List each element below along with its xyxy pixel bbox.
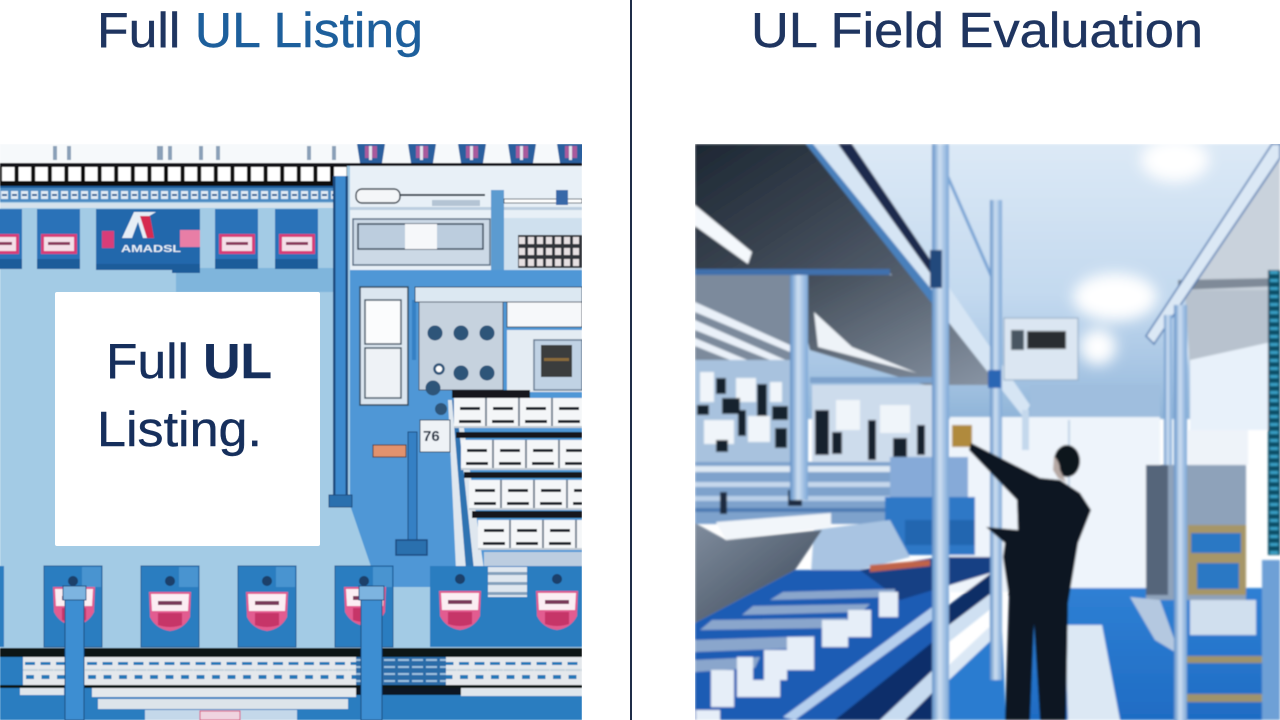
center divider line: [630, 0, 632, 720]
blue machine: [885, 457, 975, 555]
illustration wall background: [0, 165, 582, 649]
right gantry: [1190, 145, 1280, 300]
step bars: [1186, 656, 1262, 702]
lower conveyor: [0, 648, 582, 720]
rails below machinery: [695, 460, 892, 526]
small pipe, tag and label: [373, 420, 450, 555]
button control panel: [415, 287, 582, 415]
card text: Listing.: Listing.: [97, 403, 262, 457]
rails right of post: [949, 585, 1002, 642]
central logo cabinet: AMADSL: [121, 243, 182, 255]
light hopper behind: [810, 518, 910, 572]
dark underside of left gantry: [695, 144, 935, 300]
main vertical pipe: [329, 176, 352, 507]
back wall: [950, 417, 1160, 592]
floor by post: [949, 630, 1006, 720]
right posts and beads: [1164, 315, 1172, 465]
white trough: [716, 513, 831, 540]
box held up: [952, 425, 972, 447]
tray white boxes: [696, 592, 898, 720]
right wall shaded area: [350, 270, 582, 587]
technician: [969, 443, 1091, 720]
blue dashed strip: [0, 186, 335, 188]
small fixtures on top strip: [53, 146, 336, 160]
left machinery: [695, 360, 934, 475]
horizontal gantry beam: [695, 269, 890, 275]
technician body: [969, 443, 1091, 720]
title: UL Field Evaluation: UL Field Evaluation: [751, 4, 1203, 58]
upper right control panel: [350, 165, 582, 271]
panel: Full UL Listing factory illustration: [0, 144, 585, 720]
back wall band below ceiling: [1030, 385, 1160, 417]
top pale strip: [0, 144, 582, 165]
lower cabinets: [0, 566, 582, 647]
lower grey underside: [806, 273, 990, 386]
card text: Full UL: Full UL: [106, 335, 272, 389]
central logo cabinet: [96, 209, 200, 273]
fluorescent tube: [695, 205, 752, 264]
door panel: [360, 287, 416, 405]
technician face: [1053, 456, 1066, 482]
tray tops: [695, 589, 895, 672]
dark navy frame and rail: [783, 605, 935, 720]
black top rail: [0, 163, 582, 166]
white lit stripes: [695, 301, 792, 362]
ceiling lights: [1066, 144, 1213, 372]
panel: UL Field Evaluation photo: [695, 138, 1280, 720]
floor: [1010, 588, 1280, 720]
grey hopper: [695, 523, 822, 623]
ceiling: [806, 144, 1270, 420]
conveyor and trays base: [695, 557, 950, 720]
diagonal brace: [947, 175, 993, 280]
upper wall band: [176, 268, 334, 292]
upper cabinets row: [0, 203, 335, 269]
title: Full UL Listing: Full UL Listing: [97, 4, 423, 58]
tilted shelves: [448, 390, 582, 570]
vertical columns over conveyor: [63, 586, 384, 720]
left dark bay: [695, 275, 790, 365]
small pipe, tag and label: 76: [423, 428, 440, 445]
perforated black band: [0, 166, 347, 186]
gantry joints: [930, 250, 942, 288]
technician head: [1054, 445, 1080, 477]
vertical posts: [932, 144, 949, 720]
row of cups at top right: [357, 144, 585, 163]
left gantry beam: [806, 144, 1030, 418]
ceiling vent: [1004, 318, 1078, 380]
right cabinet machine: [1130, 430, 1256, 655]
lit panel: [814, 312, 917, 373]
white label card: [55, 292, 320, 546]
